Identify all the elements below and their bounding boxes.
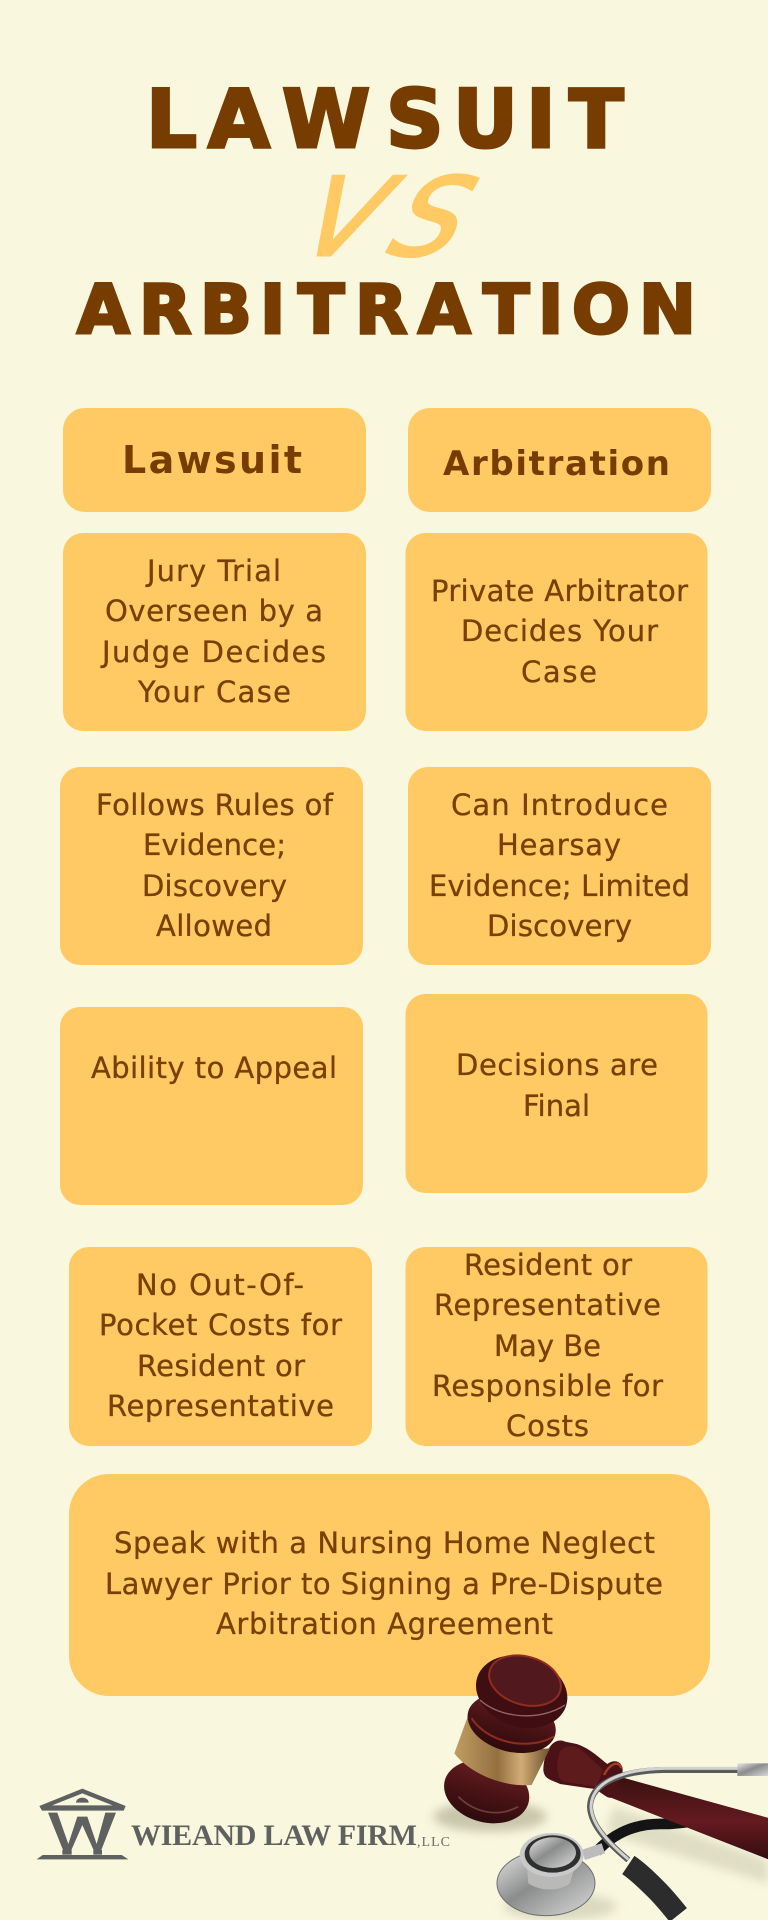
panel: who decides, lawsuit: [63, 533, 366, 731]
text: decisions are final: [456, 1048, 658, 1123]
logo: Wieand Law Firm: [37, 1789, 450, 1859]
text: no out of pocket costs: [99, 1268, 342, 1423]
text: no out of pocket costs: Pocket Costs for: [99, 1308, 342, 1342]
text: private arbitrator: Decides Your: [461, 614, 658, 648]
chest piece: [497, 1851, 595, 1916]
black tube: [597, 1820, 703, 1852]
text: no out of pocket costs: Resident or: [137, 1349, 305, 1383]
panel: costs, arbitration: [406, 1247, 708, 1446]
logo suffix: ,LLC: [417, 1835, 450, 1850]
text: may be responsible for costs: Costs: [506, 1409, 589, 1443]
text: rules of evidence: Follows Rules of: [96, 788, 334, 822]
text: decisions are final: Decisions are: [456, 1048, 658, 1082]
head lower disc: [437, 1751, 536, 1832]
text: private arbitrator: Private Arbitrator: [431, 574, 688, 608]
text: speak with a lawyer: Speak with a Nursing Home Neglect: [114, 1526, 655, 1560]
text: speak with a lawyer: [105, 1526, 663, 1641]
text: no out of pocket costs: Representative: [107, 1389, 334, 1423]
title: [77, 73, 696, 350]
panel: costs, lawsuit: [69, 1247, 372, 1446]
text: rules of evidence: [96, 788, 334, 943]
text: jury trial: Judge Decides: [100, 635, 326, 669]
panel: evidence, arbitration: [408, 767, 711, 965]
text: jury trial: Your Case: [137, 675, 291, 709]
text: speak with a lawyer: Lawyer Prior to Signing a Pre-Dispute: [105, 1567, 663, 1601]
image: gavel and stethoscope: [433, 1644, 768, 1920]
text: rules of evidence: Discovery: [142, 869, 287, 903]
text: may be responsible for costs: Responsible for: [432, 1369, 663, 1403]
text: may be responsible for costs: Resident or: [464, 1248, 632, 1282]
text: speak with a lawyer: Arbitration Agreement: [216, 1607, 553, 1641]
text: rules of evidence: Evidence;: [143, 828, 286, 862]
gold band: [454, 1715, 550, 1785]
text: jury trial: Overseen by a: [105, 594, 323, 628]
text: rules of evidence: Allowed: [156, 909, 272, 943]
logo wordmark: WIEAND LAW FIRM: [131, 1819, 417, 1852]
silver tube: [590, 1770, 768, 1860]
panel: who decides, arbitration: [406, 533, 708, 731]
panel: appeal, lawsuit: [60, 1007, 363, 1205]
handle: [608, 1775, 768, 1860]
text: private arbitrator: Case: [521, 655, 597, 689]
panel: evidence, lawsuit: [60, 767, 363, 965]
text: decisions are final: Final: [523, 1089, 590, 1123]
title: VS script: VS: [286, 155, 490, 281]
icon: temple with W: [37, 1789, 128, 1859]
text: private arbitrator: [431, 574, 688, 689]
text: hearsay evidence: Can Introduce: [451, 788, 668, 822]
panel: call to action: [69, 1474, 710, 1696]
text: may be responsible for costs: May Be: [494, 1329, 601, 1363]
text: no out of pocket costs: No Out-Of-: [136, 1268, 304, 1302]
heading: Arbitration: Arbitration: [443, 444, 670, 484]
text: may be responsible for costs: [432, 1248, 663, 1443]
panel: Lawsuit column header: [63, 408, 366, 512]
text: hearsay evidence: [429, 788, 690, 943]
neck: [543, 1741, 623, 1798]
text: hearsay evidence: Hearsay: [497, 828, 621, 862]
heading: Lawsuit: Lawsuit: [122, 438, 302, 482]
head upper ring: [461, 1684, 562, 1762]
text: ability to appeal: Ability to Appeal: [91, 1051, 337, 1085]
title: Arbitration: ARBITRATION: [77, 271, 696, 350]
text: jury trial: Jury Trial: [145, 554, 281, 588]
lower black binaural: [628, 1865, 678, 1915]
text: jury trial: [100, 554, 326, 709]
panel: appeal, arbitration: [406, 994, 708, 1193]
head top disc: [466, 1644, 577, 1739]
title: Lawsuit: LAWSUIT: [146, 73, 624, 166]
stem: [583, 1848, 603, 1855]
text: hearsay evidence: Evidence; Limited: [429, 869, 690, 903]
panel: Arbitration column header: [408, 408, 711, 512]
text: may be responsible for costs: Representative: [434, 1288, 661, 1322]
text: hearsay evidence: Discovery: [487, 909, 632, 943]
